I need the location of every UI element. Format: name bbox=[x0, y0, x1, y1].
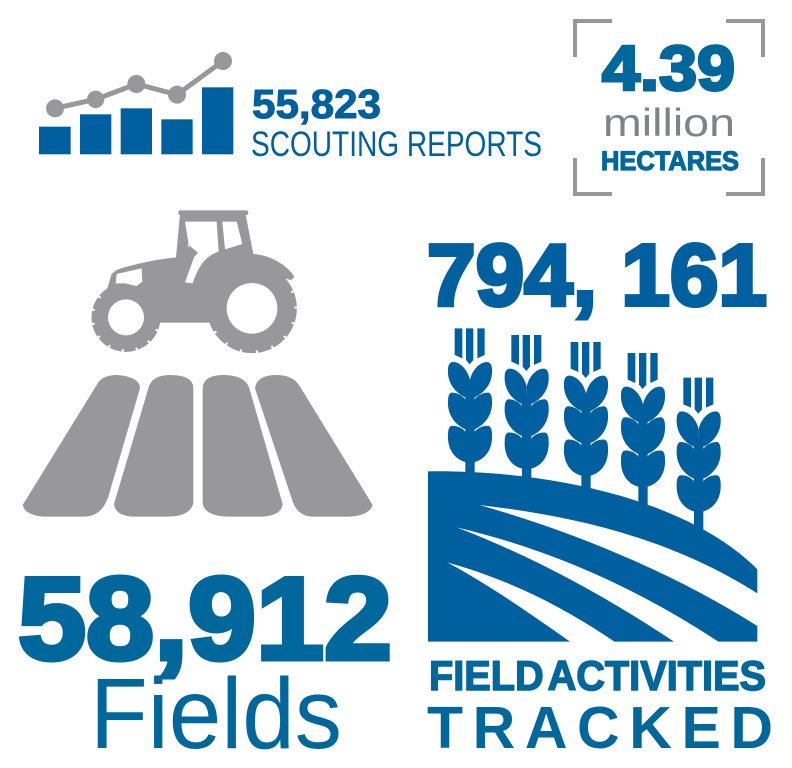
frame: corner brackets bbox=[575, 21, 763, 194]
field activities label line 1: FIELD ACTIVITIES bbox=[429, 652, 766, 699]
field activities label line 2: TRACKED bbox=[427, 695, 773, 761]
icon: bar and line chart bbox=[39, 52, 233, 154]
fields label: Fields bbox=[90, 658, 342, 768]
hectares figure: 4.39 bbox=[602, 34, 735, 104]
field activities figure: 794, 161 bbox=[427, 227, 767, 324]
scouting reports label: SCOUTING REPORTS bbox=[251, 125, 542, 164]
hectares unit: million: million bbox=[603, 102, 735, 145]
wheat stalk 1 bbox=[448, 328, 492, 482]
wheat stalk 3 bbox=[564, 342, 608, 495]
scouting reports figure: 55,823 bbox=[252, 81, 381, 127]
hectares label: HECTARES bbox=[601, 146, 739, 176]
wheat stalk 2 bbox=[505, 335, 549, 488]
icon: tractor bbox=[93, 210, 295, 352]
fields figure: 58,912 bbox=[18, 553, 392, 684]
hillside with furrows bbox=[428, 471, 759, 643]
wheat stalk 4 bbox=[621, 353, 665, 506]
icon: wheat growing on hillside bbox=[428, 328, 759, 643]
icon: crop field rows bbox=[23, 375, 373, 517]
wheat stalk 5 bbox=[677, 378, 721, 531]
